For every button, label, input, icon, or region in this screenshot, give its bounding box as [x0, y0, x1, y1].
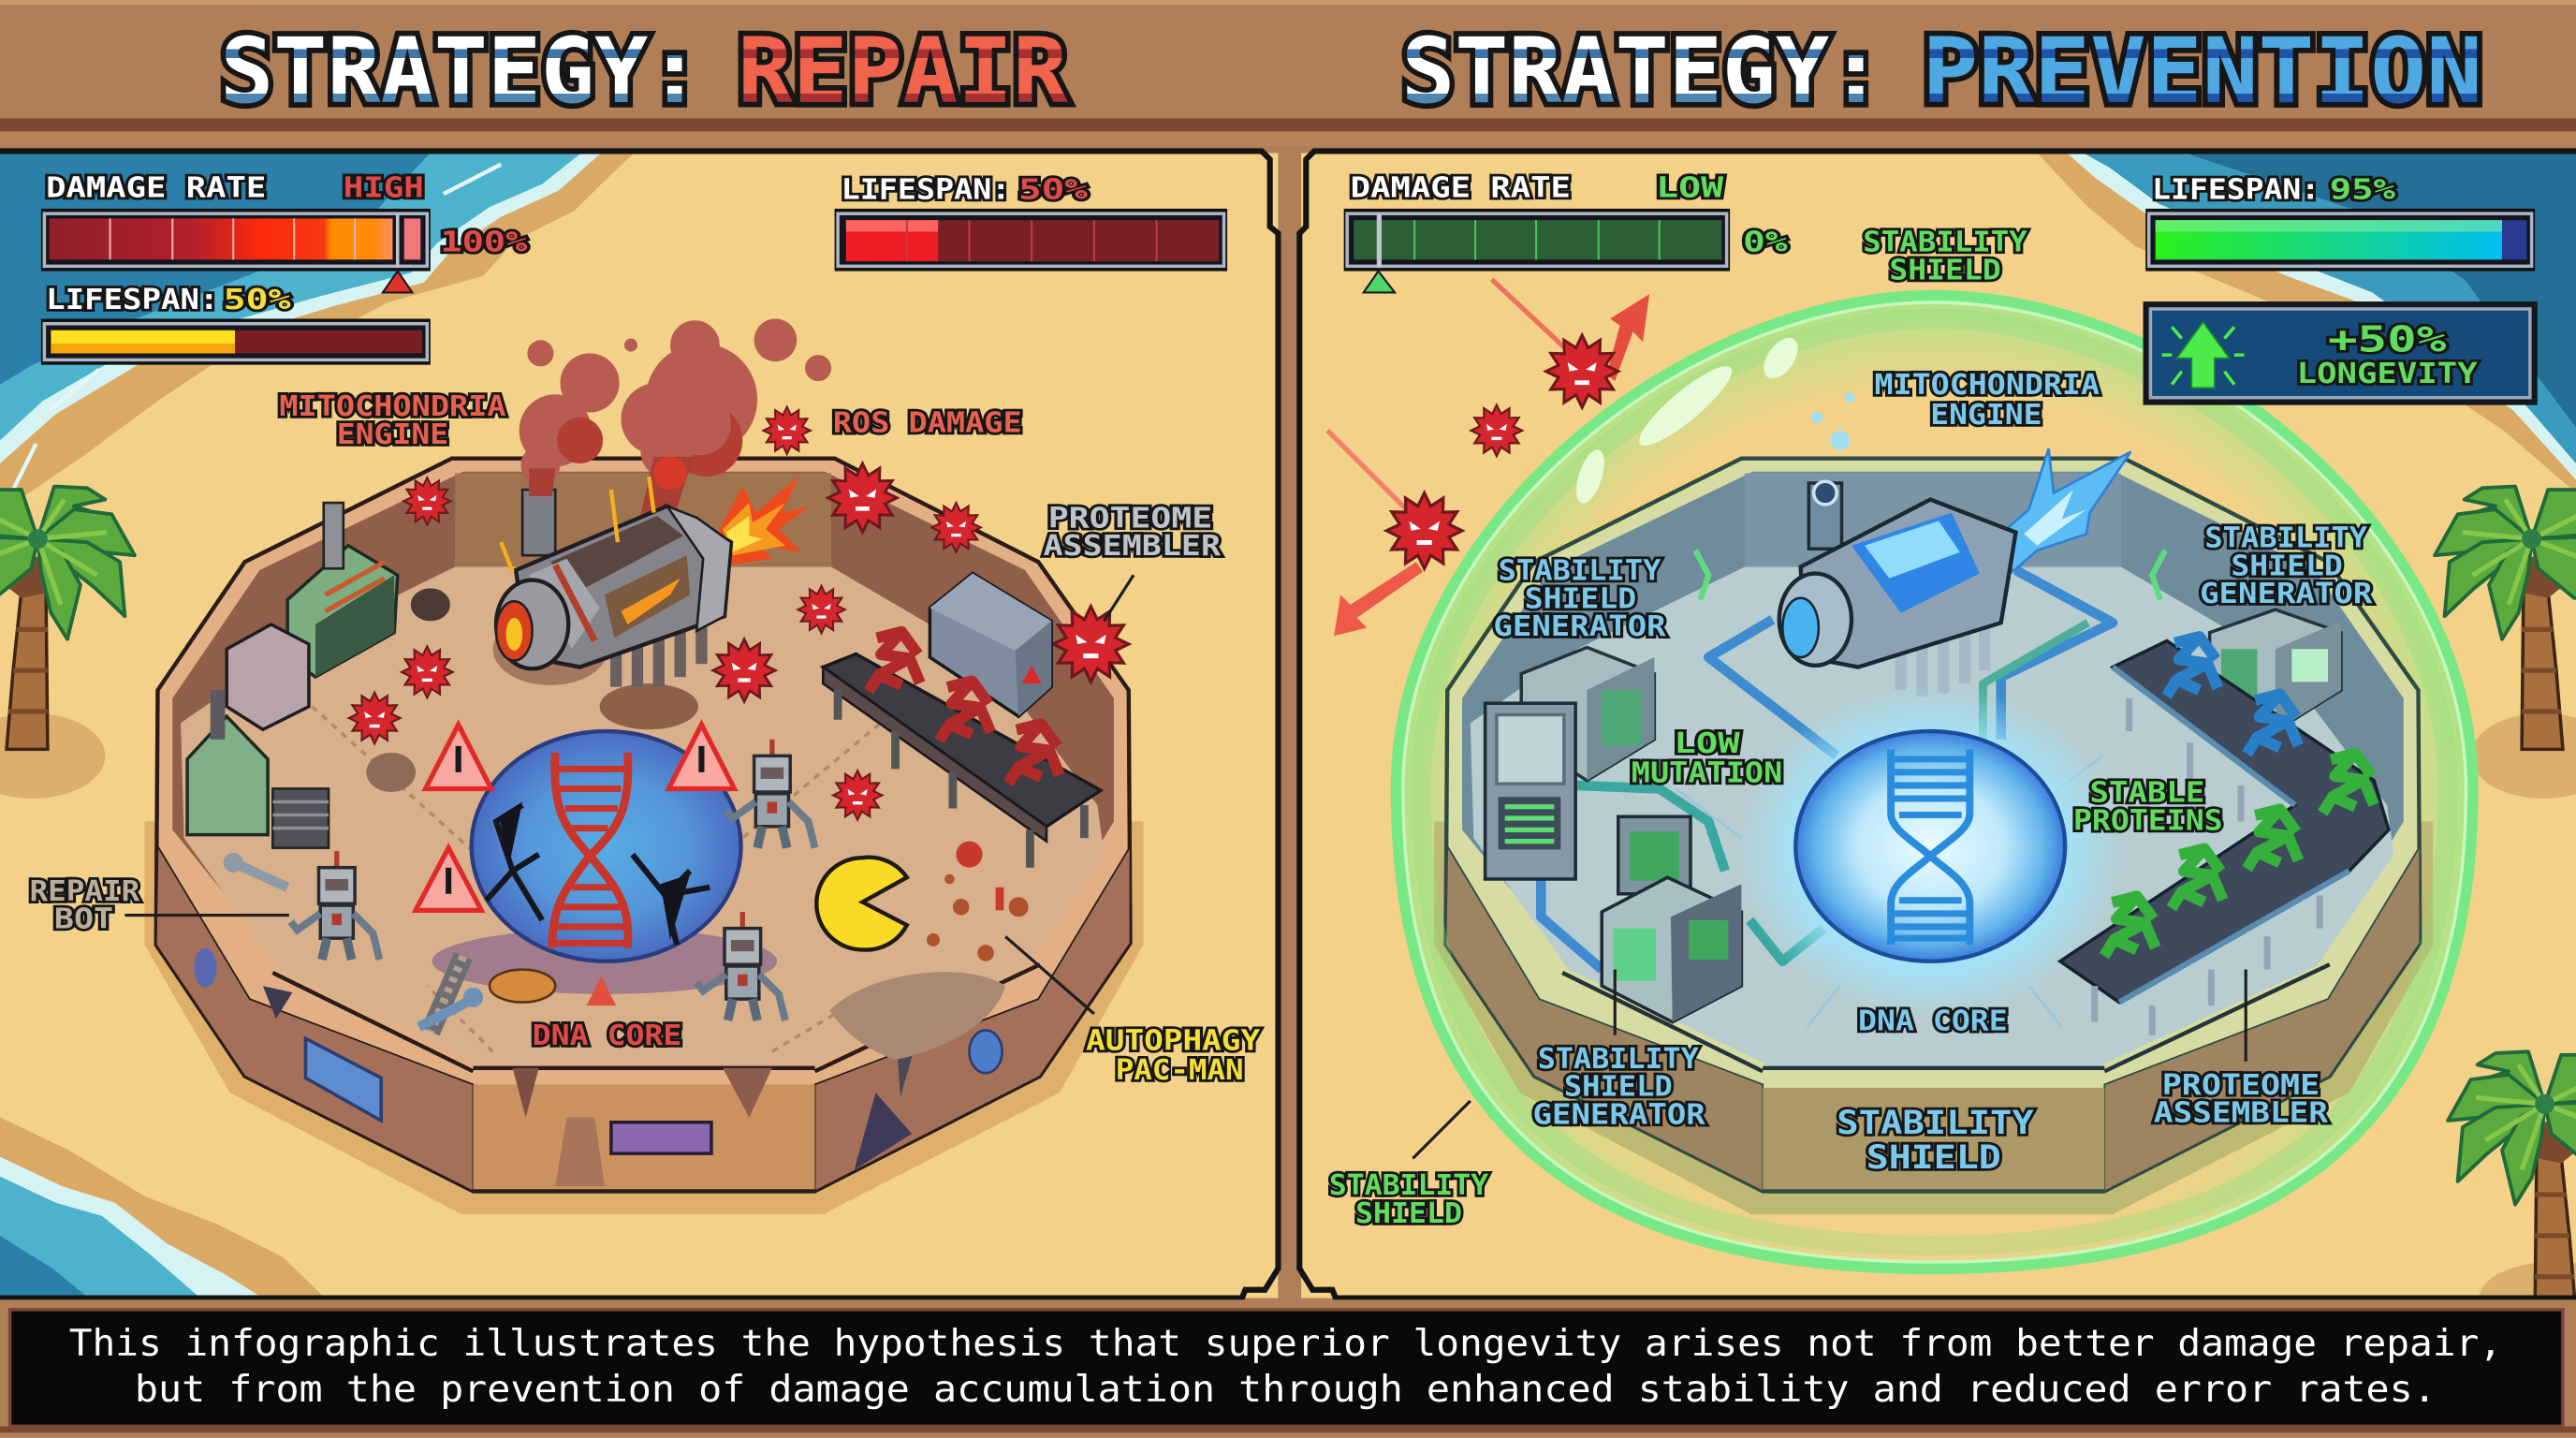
autophagy pac-man	[816, 858, 907, 950]
repair bots	[291, 740, 815, 1020]
label: stability shield on wall: SHIELD	[1866, 1138, 2001, 1177]
title: strategy prevention	[1401, 18, 2482, 124]
proteome assembler: damaged	[823, 574, 1101, 868]
label: mitochondria engine	[1875, 369, 2100, 432]
title: strategy repair	[220, 18, 1069, 124]
prevention platform	[1434, 459, 2433, 1214]
label: dna core: DNA CORE	[1858, 1005, 2008, 1037]
control console	[1486, 703, 1575, 879]
label: low mutation: LOW	[1674, 727, 1740, 760]
hud: lifespan prevention	[2145, 173, 2535, 271]
repair platform	[144, 459, 1144, 1214]
label: low mutation	[1632, 727, 1782, 789]
label: dna core: DNA CORE	[533, 1020, 681, 1052]
palm tree upper right	[2435, 487, 2576, 799]
label: proteome assembler bottom	[2154, 970, 2328, 1130]
label: mitochondria engine: ENGINE	[337, 418, 448, 451]
label: shield generator bottom	[1533, 970, 1705, 1131]
longevity callout: LONGEVITY	[2297, 358, 2478, 390]
dna core: cracked dome	[432, 731, 777, 994]
shield tint and outline	[1397, 296, 2472, 1269]
label: autophagy pac-man: PAC-MAN	[1116, 1054, 1244, 1087]
hud: lifespan prevention: LIFESPAN:	[2152, 173, 2320, 206]
label: stable proteins: PROTEINS	[2073, 804, 2223, 837]
dna helix blue	[1891, 749, 1969, 945]
label: proteome assembler	[1043, 502, 1221, 621]
palm tree left	[0, 487, 135, 799]
sea: bottom left	[0, 1117, 326, 1299]
label: ros damage: ROS DAMAGE	[833, 407, 1022, 440]
machines left of repair platform	[187, 503, 398, 848]
sea: top left	[0, 153, 634, 513]
cracks	[487, 805, 710, 945]
label: shield generator left: GENERATOR	[1493, 610, 1666, 643]
caption text	[69, 1322, 2502, 1411]
label: stability shield lower left: STABILITY	[1329, 1169, 1488, 1202]
title: strategy repair: REPAIR	[738, 18, 1069, 124]
label: shield generator right: STABILITY	[2204, 521, 2367, 554]
label: mitochondria engine	[279, 390, 506, 451]
dna helix red	[552, 753, 628, 948]
pipes	[1541, 570, 2113, 970]
hud: damage rate repair: HIGH	[344, 172, 424, 205]
label: shield generator right: SHIELD	[2231, 550, 2343, 582]
shield generator right	[2210, 609, 2341, 731]
hud: lifespan repair small	[41, 284, 431, 365]
label: repair bot	[30, 875, 289, 936]
mitochondria engine: damaged	[496, 477, 810, 687]
hud: damage rate prevention	[1344, 172, 1788, 292]
hud: damage rate repair	[41, 172, 527, 292]
ros damage particles	[349, 407, 1129, 820]
label: low mutation: MUTATION	[1632, 756, 1782, 789]
caption text: but from the prevention of damage accumulation through enhanced stability and reduced error rates.	[135, 1368, 2437, 1411]
label: shield generator left: SHIELD	[1525, 582, 1636, 615]
label: stability shield lower left: SHIELD	[1355, 1197, 1462, 1230]
bubble highlights	[1571, 331, 1855, 506]
label: stable proteins: STABLE	[2089, 776, 2204, 809]
label: mitochondria engine: MITOCHONDRIA	[279, 390, 506, 423]
title: strategy prevention: PREVENTION	[1922, 18, 2482, 124]
label: shield generator right: GENERATOR	[2200, 578, 2372, 610]
hud: lifespan repair large: LIFESPAN:	[842, 173, 1010, 206]
wall damage and panels	[194, 948, 1003, 1186]
caption box	[0, 1299, 2576, 1438]
hud: damage rate prevention: LOW	[1656, 172, 1723, 205]
label: repair bot: REPAIR	[30, 875, 139, 908]
label: stability shield lower left	[1329, 1101, 1488, 1230]
shield generator left	[1521, 648, 1654, 781]
label: autophagy pac-man: AUTOPHAGY	[1086, 1025, 1260, 1058]
conveyor with stable proteins	[2060, 637, 2389, 1035]
chimney and smoke	[520, 318, 831, 555]
label: proteome assembler bottom: PROTEOME	[2162, 1069, 2320, 1102]
label: autophagy pac-man	[1005, 936, 1260, 1087]
hud: damage rate repair: DAMAGE RATE	[46, 172, 266, 205]
label: shield generator left	[1493, 555, 1666, 643]
title: strategy repair: STRATEGY:	[220, 18, 701, 124]
longevity callout: +50%	[2328, 319, 2446, 361]
panel: repair strategy	[0, 153, 1278, 1299]
label: proteome assembler bottom: ASSEMBLER	[2154, 1097, 2328, 1130]
shield generator center	[1602, 816, 1741, 1022]
sea: top right	[2037, 153, 2576, 493]
label: shield generator bottom: GENERATOR	[1533, 1098, 1705, 1131]
label: repair bot: BOT	[54, 903, 113, 936]
floor stains	[366, 588, 1005, 1060]
ros particles deflected	[1327, 279, 1649, 636]
stability shield bubble fill	[1397, 296, 2472, 1269]
label: shield generator bottom: SHIELD	[1564, 1071, 1673, 1104]
header band	[0, 0, 2576, 146]
label: stability shield on wall: STABILITY	[1837, 1104, 2034, 1142]
label: shield generator bottom: STABILITY	[1538, 1043, 1699, 1076]
caption text: This infographic illustrates the hypothesis that superior longevity arises not from better damage repair,	[69, 1322, 2502, 1365]
longevity callout	[2147, 305, 2533, 401]
label: stability shield on wall	[1837, 1104, 2034, 1177]
hud: damage rate prevention: 0%	[1743, 227, 1788, 259]
label: shield generator right	[2200, 521, 2372, 610]
hud: lifespan repair small: LIFESPAN:	[46, 284, 218, 316]
label: stability shield top: SHIELD	[1889, 254, 2001, 286]
label: proteome assembler: ASSEMBLER	[1043, 530, 1221, 563]
hud: damage rate prevention: DAMAGE RATE	[1351, 172, 1571, 205]
panel: prevention strategy	[1301, 153, 2576, 1334]
hud: lifespan prevention: 95%	[2330, 173, 2395, 206]
tools and debris	[224, 842, 1029, 1032]
label: proteome assembler: PROTEOME	[1048, 502, 1212, 535]
panel borders and divider	[0, 151, 2576, 1299]
dna core: protected dome	[1736, 683, 2124, 1019]
label: shield generator left: STABILITY	[1499, 555, 1661, 588]
hud: lifespan repair small: 50%	[224, 284, 291, 316]
hud: lifespan repair large	[835, 173, 1227, 271]
hud: damage rate repair: 100%	[440, 227, 527, 259]
title: strategy prevention: STRATEGY:	[1401, 18, 1882, 124]
warning triangles	[416, 725, 735, 910]
hud: lifespan repair large: 50%	[1018, 173, 1088, 206]
label: stable proteins	[2073, 776, 2223, 837]
label: mitochondria engine: ENGINE	[1930, 399, 2042, 432]
icon: up arrow	[2162, 322, 2244, 388]
label: stability shield top	[1863, 227, 2027, 286]
label: stability shield top: STABILITY	[1863, 227, 2027, 259]
palm tree lower right	[2446, 1049, 2576, 1296]
mitochondria engine: healthy	[1779, 448, 2130, 697]
label: mitochondria engine: MITOCHONDRIA	[1875, 369, 2100, 402]
